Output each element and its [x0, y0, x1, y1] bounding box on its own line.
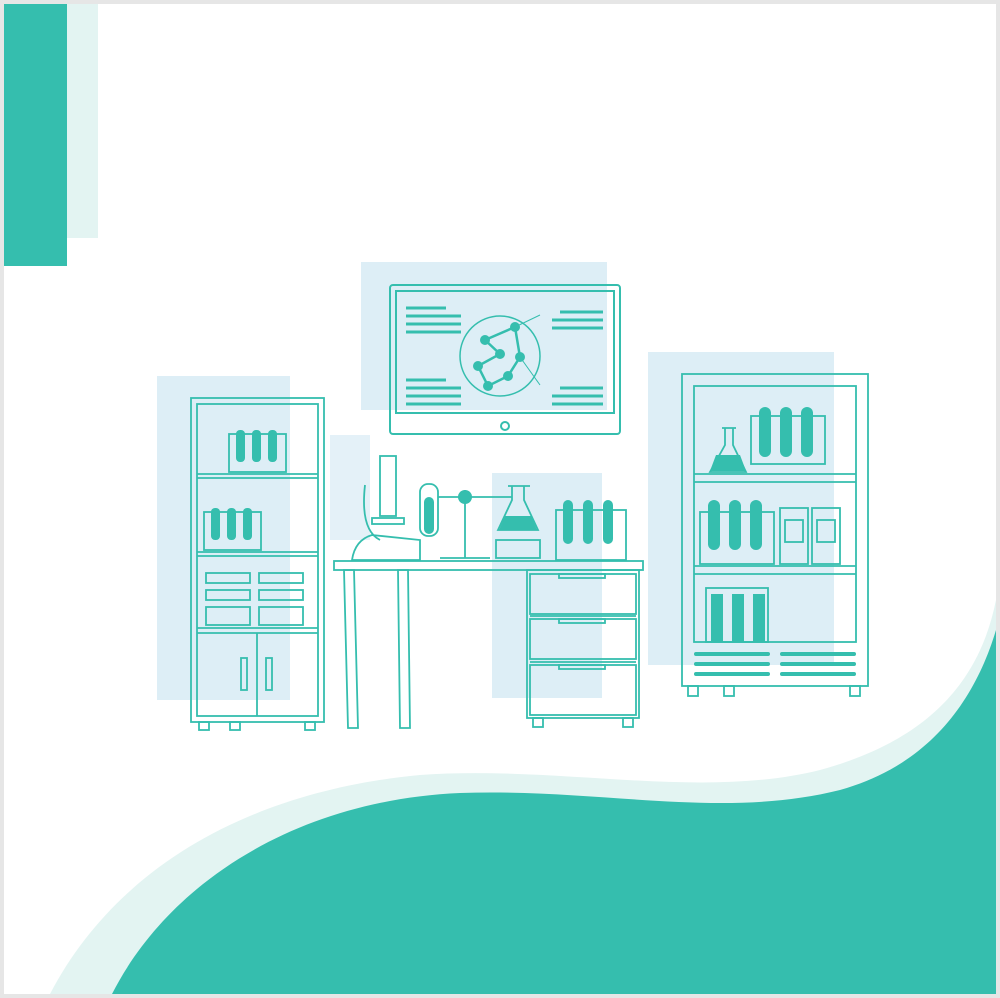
background blue panels	[157, 262, 834, 700]
corner accent	[4, 4, 98, 266]
monitor	[390, 285, 620, 434]
bottom wave	[50, 600, 996, 994]
microscope	[352, 535, 420, 560]
desk	[334, 456, 643, 728]
right cabinet	[682, 374, 868, 696]
left cabinet	[191, 398, 324, 730]
